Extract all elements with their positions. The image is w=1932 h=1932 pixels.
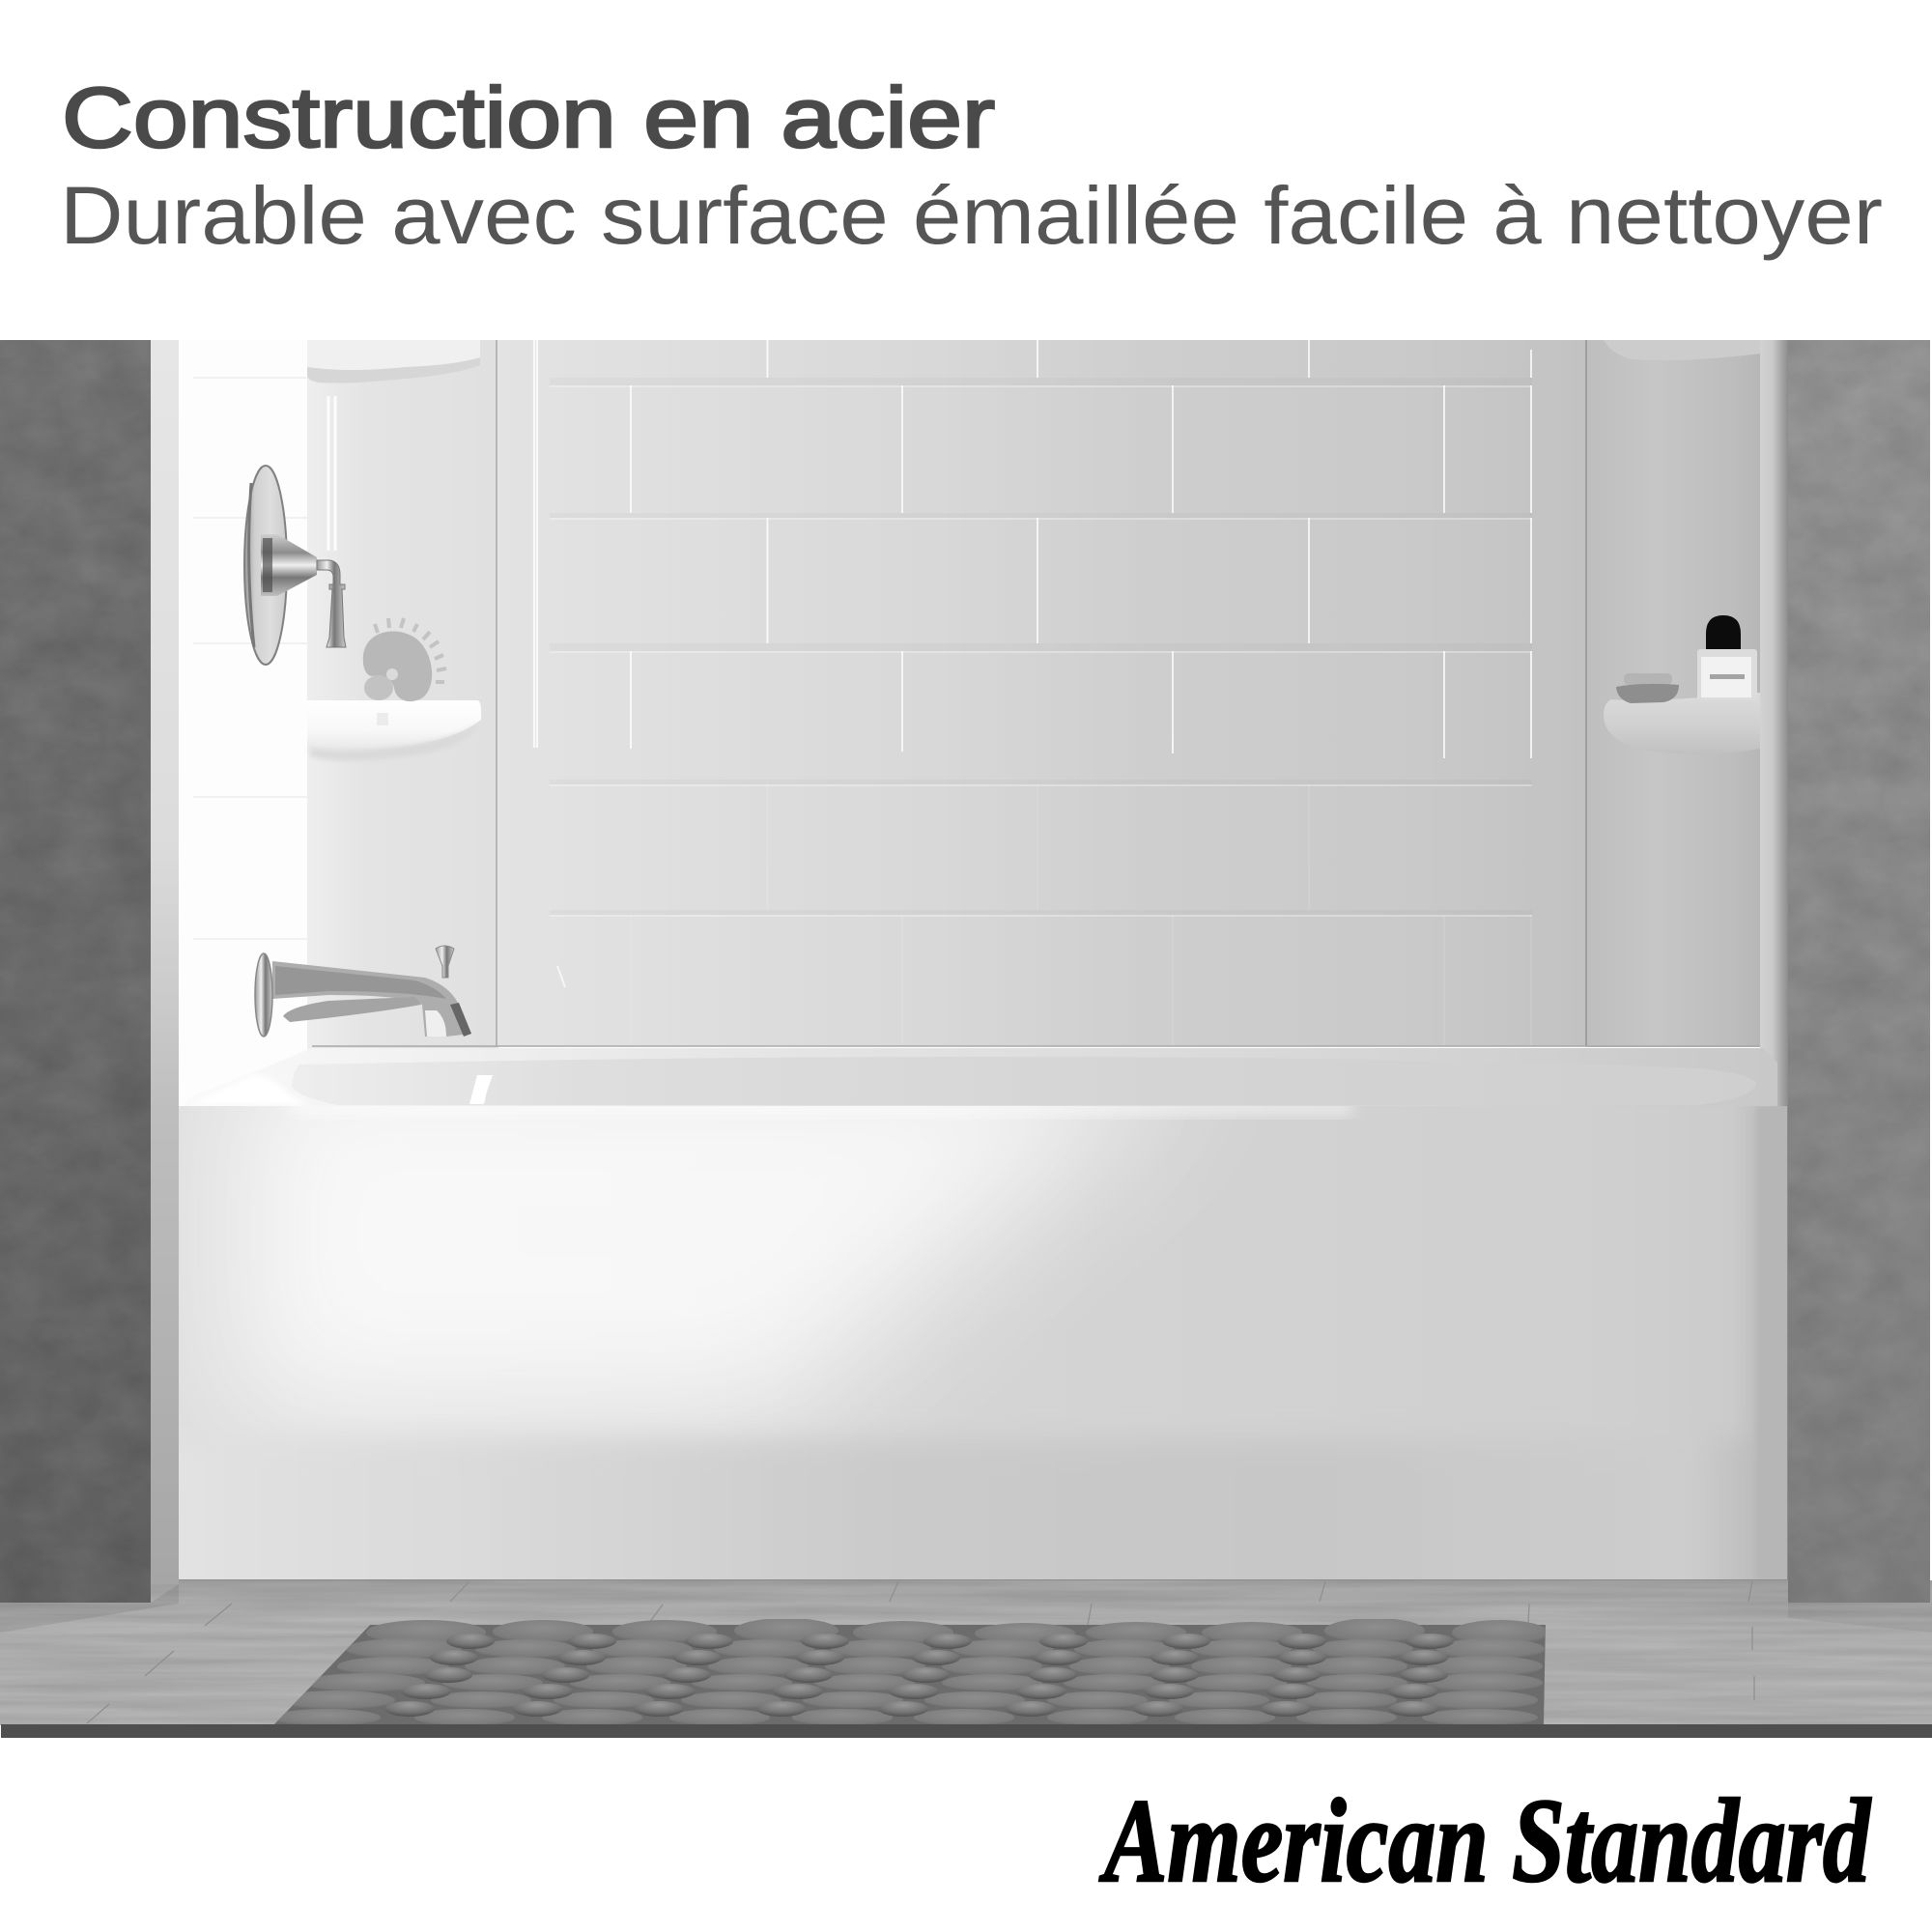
escutcheon plate <box>244 466 287 665</box>
heading: Construction en acier <box>62 70 995 165</box>
bathroom photo <box>0 340 1932 1738</box>
large pebbles <box>272 1618 1548 1726</box>
small pebbles <box>384 1634 1454 1717</box>
soap dish <box>1616 673 1679 703</box>
left niche <box>307 340 498 1050</box>
basin highlight <box>469 1075 493 1104</box>
floor <box>0 1580 1932 1725</box>
right panel <box>1586 340 1760 1047</box>
tub surround <box>179 340 1788 1113</box>
tub basin <box>292 1057 1756 1105</box>
bathtub <box>179 1048 1788 1580</box>
left upper shelf <box>307 340 480 383</box>
title block <box>60 70 1883 261</box>
bath mat <box>270 1618 1550 1726</box>
diverter knob <box>436 946 454 978</box>
right concrete wall <box>1788 340 1930 1603</box>
dark floor band <box>1 1724 1932 1738</box>
right upper shelf <box>1604 340 1760 360</box>
left wall return strip <box>151 340 179 1584</box>
tub spout <box>255 946 471 1037</box>
right panel seam <box>1585 340 1587 1046</box>
subheading: Durable avec surface émaillée facile à nettoyer <box>60 170 1883 261</box>
spout flange <box>255 953 272 1037</box>
centre tile panel <box>497 340 1586 1046</box>
shower valve <box>244 466 346 665</box>
left concrete wall <box>0 340 151 1603</box>
left niche highlights <box>328 396 335 551</box>
tub rim deck <box>184 1048 1777 1106</box>
right lower shelf <box>1604 693 1760 754</box>
left white column <box>179 340 309 1113</box>
tub apron <box>179 1106 1788 1580</box>
handle cone <box>261 534 317 596</box>
sponge <box>363 618 446 701</box>
left upper shelf face <box>307 340 480 370</box>
left lower shelf <box>307 700 481 760</box>
lever <box>317 560 346 647</box>
perfume bottle <box>1697 615 1757 700</box>
tub inner gloss <box>190 1074 309 1105</box>
right trim <box>1760 340 1788 1106</box>
mat base <box>270 1625 1550 1725</box>
handle hub <box>263 538 272 592</box>
tub shadow line <box>312 1045 1760 1047</box>
